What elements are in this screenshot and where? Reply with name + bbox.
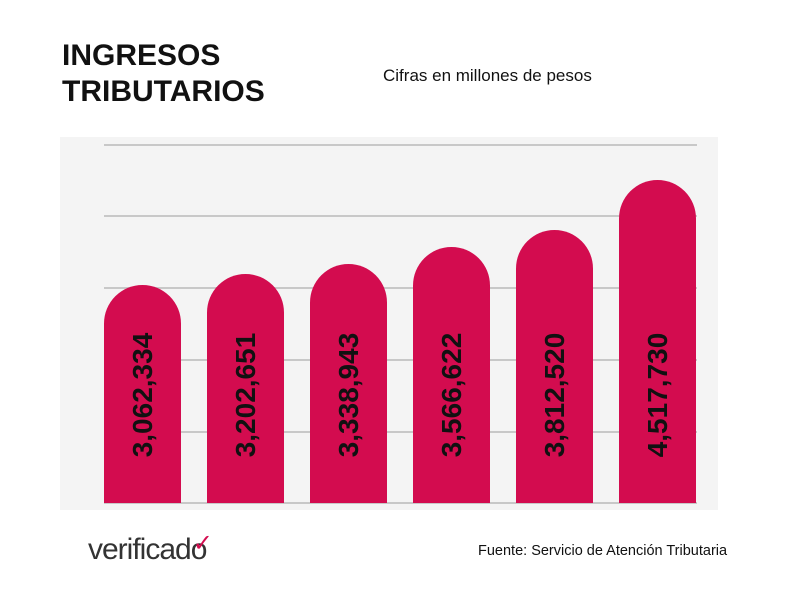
bar 6 [619, 180, 696, 503]
label 4: 3,566,622 [436, 333, 466, 457]
title: TRIBUTARIOS [62, 75, 265, 108]
label 6: 4,517,730 [642, 333, 672, 457]
bar 4 [413, 247, 490, 503]
bar 5 [516, 230, 593, 503]
logo: verificado [88, 533, 206, 566]
subtitle: Cifras en millones de pesos [383, 66, 592, 85]
label 5: 3,812,520 [538, 333, 570, 457]
bar 1 [104, 285, 181, 503]
bar 2 [207, 274, 284, 503]
title [62, 39, 265, 108]
label 2: 3,202,651 [230, 333, 260, 457]
bar 3 [310, 264, 387, 503]
title: INGRESOS [62, 39, 220, 72]
logo: ✓ [193, 530, 212, 557]
panel: bar chart [60, 137, 718, 510]
label 1: 3,062,334 [126, 333, 158, 457]
label 3: 3,338,943 [332, 333, 364, 457]
source: Fuente: Servicio de Atención Tributaria [478, 543, 727, 559]
